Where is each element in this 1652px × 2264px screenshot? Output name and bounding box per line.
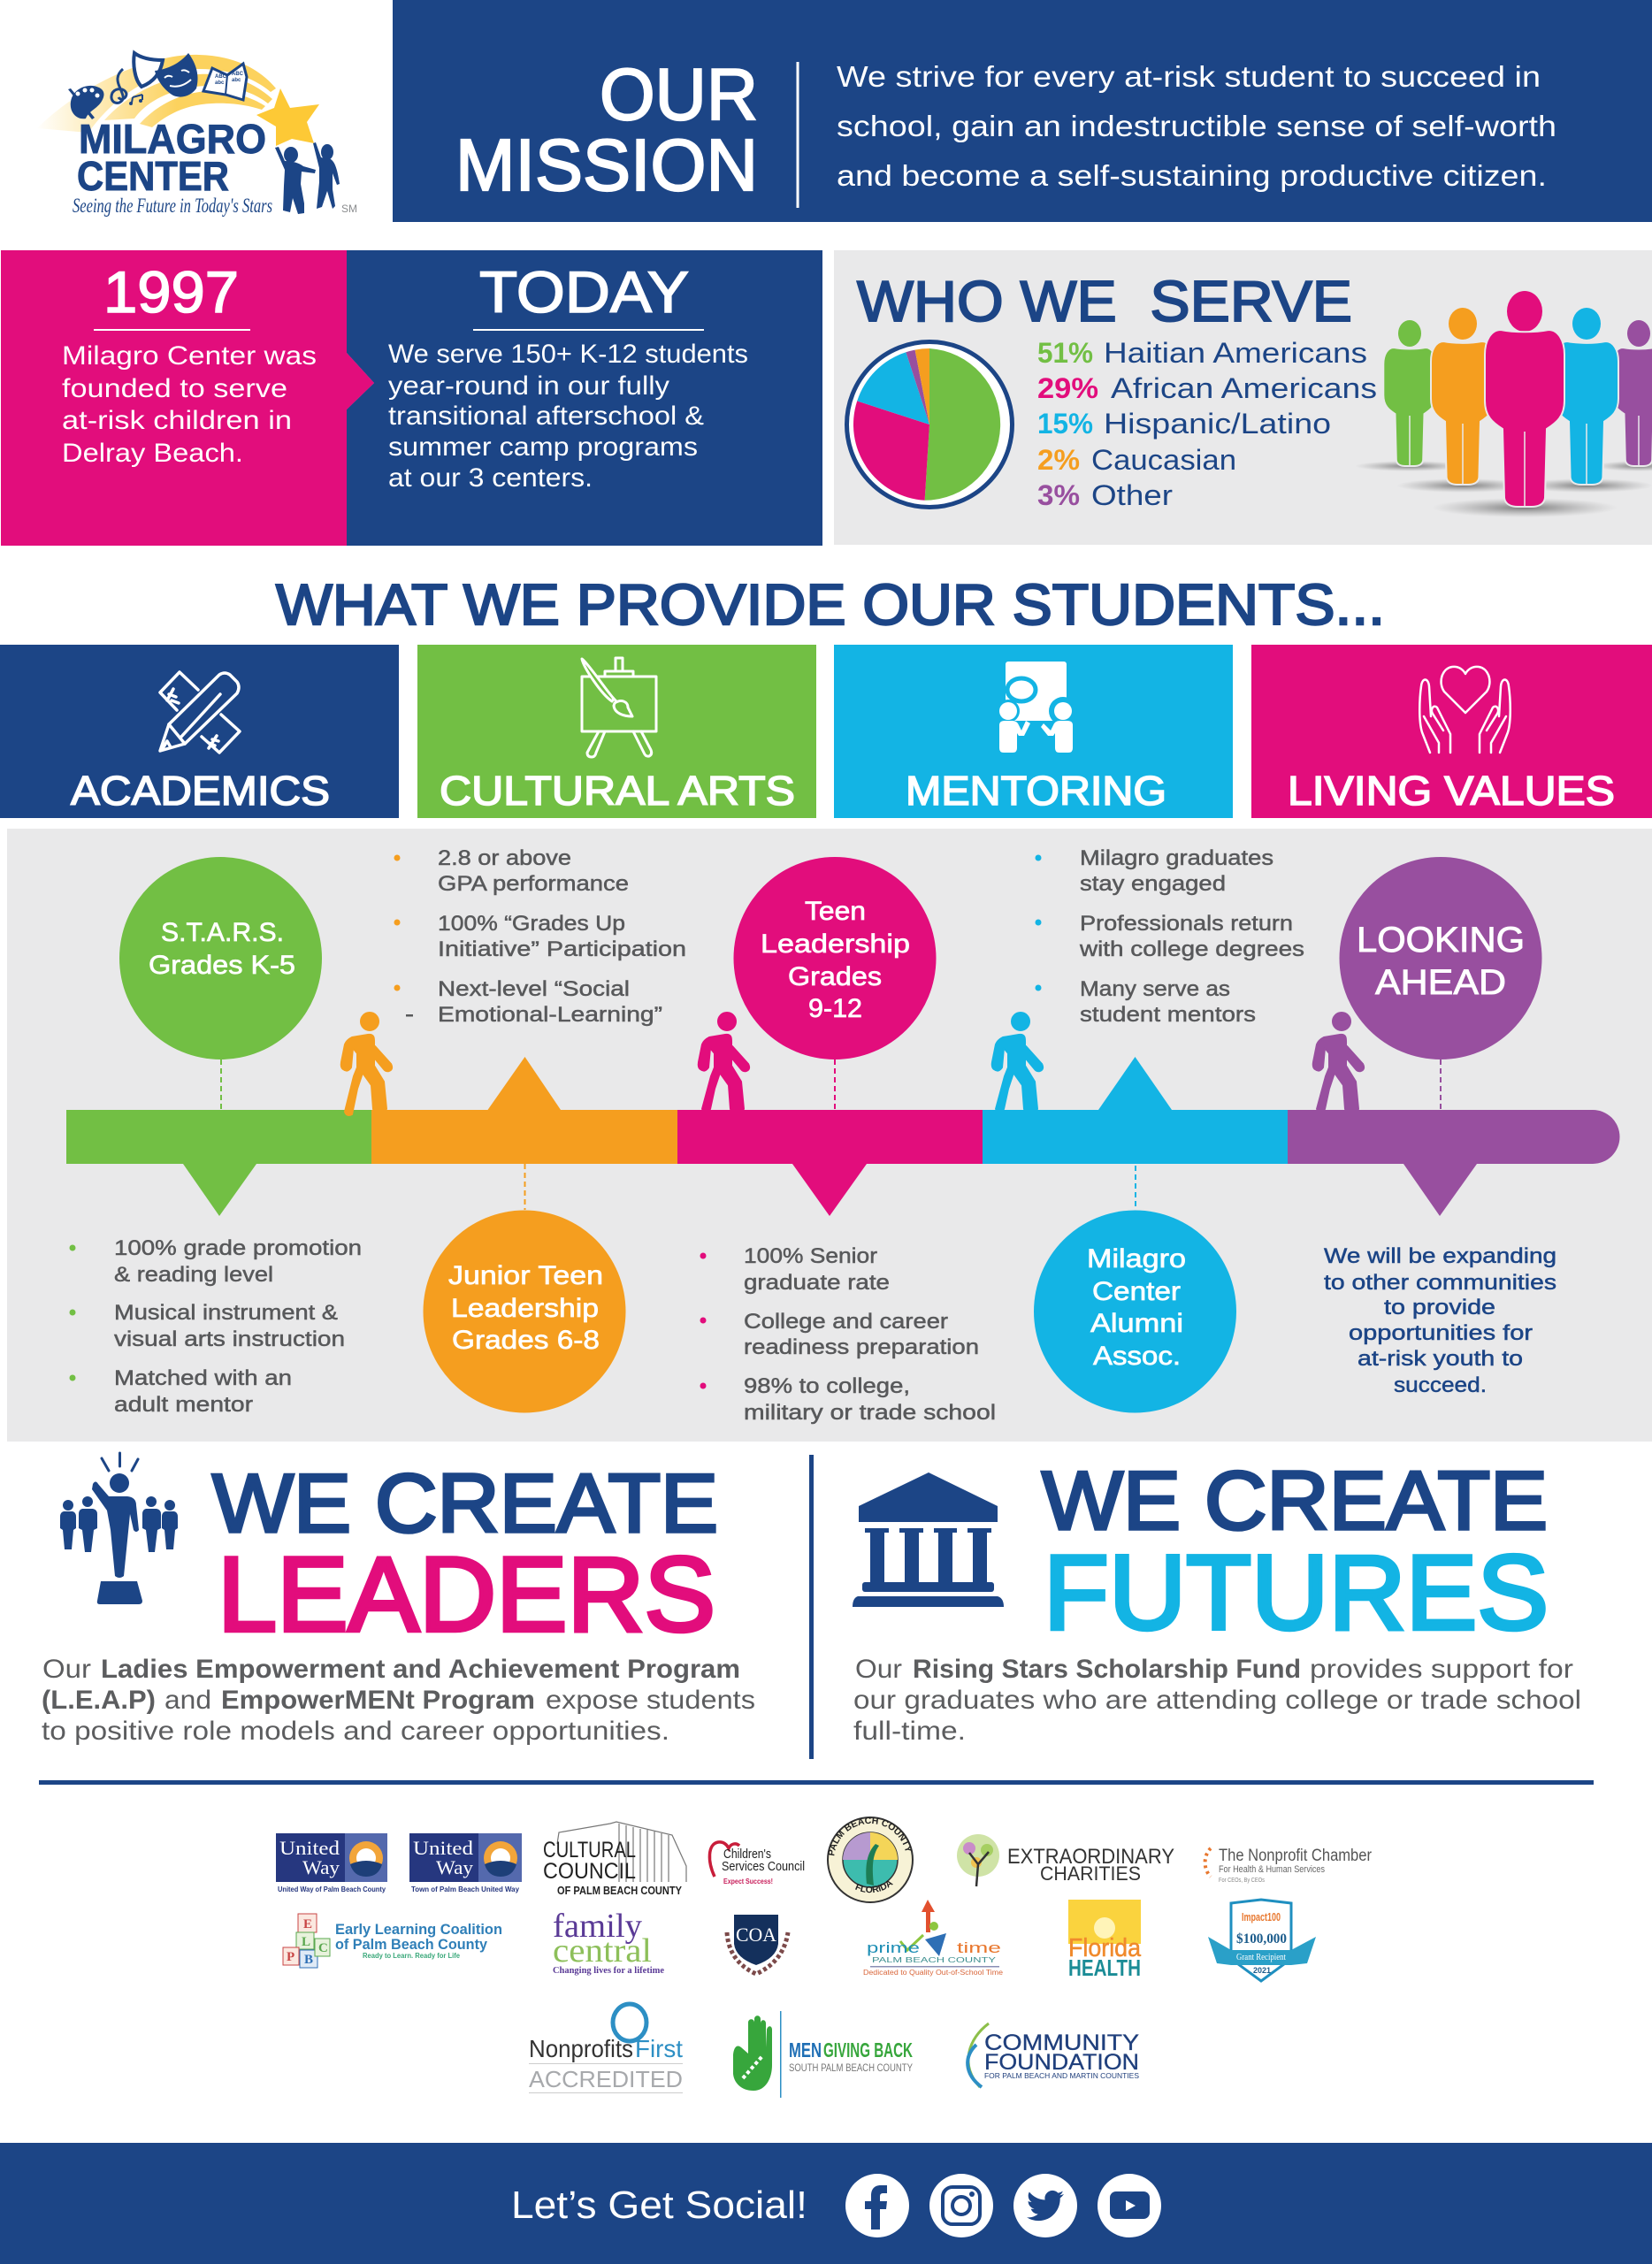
logo: star bbox=[256, 88, 319, 146]
circle: S.T.A.R.S.: Grades K-5 bbox=[149, 951, 295, 980]
futures paragraph: our graduates who are attending college or trade school bbox=[853, 1686, 1581, 1715]
heading: we create: WE CREATE bbox=[1042, 1454, 1548, 1547]
heading: futures: FUTURES bbox=[1044, 1534, 1549, 1652]
list: stars outcomes bbox=[69, 1236, 362, 1417]
list: alumni outcomes: Professionals return bbox=[1080, 912, 1293, 936]
logo: Cultural Council: COUNCIL bbox=[543, 1859, 636, 1884]
logo: United Way of Palm Beach County: Way bbox=[302, 1856, 340, 1878]
label: CULTURAL ARTS bbox=[440, 768, 795, 814]
list: alumni outcomes: with college degrees bbox=[1079, 937, 1304, 961]
logo: Men Giving Back bbox=[733, 2011, 913, 2098]
1997 text: at-risk children in bbox=[62, 406, 292, 435]
logo: COA: COA bbox=[736, 1924, 776, 1946]
today text: at our 3 centers. bbox=[388, 463, 593, 493]
logo: Early Learning Coalition: B bbox=[304, 1953, 313, 1967]
logo: Town of Palm Beach United Way bbox=[409, 1833, 522, 1893]
panel: we create leaders bbox=[42, 1453, 755, 1746]
today text: transitional afterschool & bbox=[388, 402, 704, 431]
list: junior teen outcomes: 100% “Grades Up bbox=[438, 912, 625, 936]
logo: Prime Time: prime bbox=[867, 1939, 920, 1956]
icon: hands holding heart bbox=[1419, 667, 1511, 753]
list: teen leadership outcomes: College and career bbox=[744, 1310, 948, 1334]
circle: S.T.A.R.S. bbox=[119, 857, 322, 1059]
logo: wordmark bbox=[77, 116, 266, 199]
logo: Florida Health bbox=[1068, 1900, 1142, 1981]
logo: open book: abc bbox=[232, 78, 241, 83]
list: alumni outcomes: Milagro graduates bbox=[1080, 846, 1273, 870]
logo: open book: ABC bbox=[232, 72, 244, 77]
legend: Caucasian bbox=[1091, 444, 1236, 476]
logo: Men Giving Back: GIVING BACK bbox=[823, 2038, 913, 2061]
panel: 1997 bbox=[1, 250, 374, 546]
list: stars outcomes: & reading level bbox=[114, 1263, 273, 1287]
logo: Early Learning Coalition: Ready to Learn. Ready for Life bbox=[363, 1952, 461, 1960]
panel: who we serve bbox=[834, 250, 1652, 545]
footer: social bbox=[0, 2143, 1652, 2264]
futures paragraph: Rising Stars Scholarship Fund bbox=[913, 1655, 1301, 1684]
text: looking ahead: to other communities bbox=[1324, 1271, 1556, 1295]
legend: African Americans bbox=[1111, 372, 1377, 404]
circle: teen leadership bbox=[734, 857, 936, 1059]
circle: S.T.A.R.S.: S.T.A.R.S. bbox=[161, 918, 284, 947]
panel: our mission bbox=[393, 0, 1652, 222]
logo: wordmark: MILAGRO bbox=[79, 116, 266, 162]
circle: alumni association: Milagro bbox=[1087, 1244, 1186, 1274]
logo: theatre masks bbox=[134, 53, 198, 97]
list: junior teen outcomes: Next-level “Social bbox=[438, 977, 630, 1001]
label: MENTORING bbox=[906, 768, 1166, 814]
logo: Children's Services Council: Expect Success! bbox=[723, 1878, 773, 1885]
list: teen leadership outcomes: 100% Senior bbox=[744, 1244, 877, 1268]
heading: we create: WE CREATE bbox=[212, 1457, 718, 1549]
list: stars outcomes: Musical instrument & bbox=[114, 1301, 338, 1325]
circle: junior teen leadership bbox=[423, 1210, 626, 1413]
logo: children silhouettes bbox=[275, 142, 340, 214]
circle: junior teen leadership: Junior Teen bbox=[448, 1261, 603, 1290]
logo: Children's Services Council: Children's bbox=[723, 1847, 771, 1862]
circle: teen leadership: Leadership bbox=[761, 929, 910, 959]
leaders paragraph: Our bbox=[42, 1655, 91, 1684]
icon: mentor and student bbox=[997, 662, 1077, 753]
logo: Impact 100: Impact100 bbox=[1242, 1910, 1281, 1924]
legend: Hispanic/Latino bbox=[1104, 408, 1331, 440]
list: teen leadership outcomes bbox=[700, 1244, 996, 1425]
leaders paragraph bbox=[42, 1655, 755, 1746]
icon: facebook bbox=[845, 2174, 909, 2237]
legend bbox=[1037, 337, 1377, 511]
logo: Extraordinary Charities: EXTRAORDINARY bbox=[1007, 1845, 1174, 1869]
logo: Children's Services Council: Services Council bbox=[722, 1859, 805, 1874]
circle: junior teen leadership: Leadership bbox=[451, 1294, 599, 1323]
icon: institution building bbox=[853, 1472, 1004, 1607]
logo: Men Giving Back: SOUTH PALM BEACH COUNTY bbox=[789, 2061, 913, 2074]
list: teen leadership outcomes: readiness preparation bbox=[744, 1335, 979, 1359]
logo: Early Learning Coalition: L bbox=[302, 1935, 310, 1949]
list: teen leadership outcomes: 98% to college, bbox=[744, 1374, 910, 1398]
mission statement: and become a self-sustaining productive citizen. bbox=[837, 159, 1547, 192]
text: looking ahead: We will be expanding bbox=[1324, 1244, 1556, 1268]
list: junior teen outcomes: Initiative” Participation bbox=[438, 937, 686, 961]
circle: alumni association: Assoc. bbox=[1093, 1342, 1181, 1371]
logo: yellow rainbow arcs bbox=[37, 55, 276, 133]
logo: Prime Time: PALM BEACH COUNTY bbox=[872, 1956, 997, 1964]
logo: open book: abc bbox=[215, 80, 225, 86]
heading: what we provide: WHAT WE PROVIDE OUR STUDENTS... bbox=[276, 572, 1385, 637]
legend: 3% bbox=[1037, 479, 1080, 511]
heading: leaders: LEADERS bbox=[218, 1535, 715, 1654]
logo: Community Foundation bbox=[967, 2023, 1139, 2087]
legend: 15% bbox=[1037, 408, 1093, 440]
sponsor logos bbox=[276, 1817, 1373, 2098]
icon: twitter bbox=[1013, 2174, 1077, 2237]
logo: Palm Beach County seal bbox=[827, 1817, 914, 1903]
legend: Other bbox=[1091, 479, 1173, 511]
logo: Early Learning Coalition bbox=[283, 1914, 502, 1968]
logo: Prime Time: Dedicated to Quality Out-of-School Time bbox=[863, 1969, 1004, 1977]
leaders paragraph: to positive role models and career opportunities. bbox=[42, 1717, 669, 1746]
logo: Florida Health: Florida bbox=[1068, 1934, 1142, 1962]
logo: Palm Beach County seal: FLORIDA bbox=[855, 1880, 893, 1893]
logo: treble clef and notes bbox=[111, 69, 142, 105]
pie chart bbox=[847, 341, 1012, 508]
logo: Town of Palm Beach United Way: United bbox=[413, 1837, 473, 1859]
leaders paragraph: expose students bbox=[546, 1686, 755, 1715]
panel: we create futures bbox=[853, 1454, 1581, 1746]
icon: walker orange bbox=[341, 1013, 392, 1115]
today text: We serve 150+ K-12 students bbox=[388, 340, 748, 369]
list: junior teen outcomes: Emotional-Learning” bbox=[438, 1003, 662, 1027]
tile: living values bbox=[1251, 645, 1652, 818]
who we serve heading: WHO WE SERVE bbox=[857, 269, 1352, 333]
tile: academics bbox=[0, 645, 399, 818]
futures paragraph: full-time. bbox=[853, 1717, 966, 1746]
logo: Early Learning Coalition: P bbox=[287, 1950, 294, 1964]
tile: mentoring bbox=[834, 645, 1233, 818]
icon: instagram bbox=[929, 2174, 993, 2237]
logo: Prime Time bbox=[863, 1900, 1004, 1977]
logo: United Way of Palm Beach County bbox=[276, 1833, 387, 1893]
logo: Nonprofits First: First bbox=[635, 2035, 683, 2062]
logo: Community Foundation: COMMUNITY bbox=[984, 2031, 1139, 2055]
logo: wordmark: CENTER bbox=[77, 153, 229, 199]
legend: Haitian Americans bbox=[1104, 337, 1367, 369]
logo: Nonprofits First: ACCREDITED bbox=[529, 2066, 683, 2092]
mission statement: We strive for every at-risk student to succeed in bbox=[837, 60, 1541, 93]
icon: youtube bbox=[1098, 2174, 1161, 2237]
text: looking ahead: succeed. bbox=[1394, 1373, 1487, 1397]
futures paragraph: Our bbox=[855, 1655, 902, 1684]
logo: Florida Health: HEALTH bbox=[1068, 1954, 1141, 1981]
logo: Nonprofits First: Nonprofits bbox=[529, 2035, 633, 2062]
1997 text: Delray Beach. bbox=[62, 439, 243, 468]
icon: easel and brush bbox=[582, 658, 656, 757]
logo: Extraordinary Charities bbox=[957, 1834, 1174, 1886]
icon: walker purple bbox=[1313, 1013, 1364, 1109]
logo: service mark: SM bbox=[341, 203, 357, 215]
tile: cultural arts bbox=[417, 645, 816, 818]
logo: Impact 100 bbox=[1208, 1900, 1316, 1981]
list: teen leadership outcomes: military or trade school bbox=[744, 1401, 996, 1425]
logo: Early Learning Coalition: C bbox=[318, 1941, 328, 1955]
1997 text bbox=[62, 341, 317, 468]
circle: alumni association: Center bbox=[1092, 1277, 1181, 1306]
logo: Palm Beach County seal: PALM BEACH COUNTY bbox=[828, 1817, 913, 1855]
circle: teen leadership: Teen bbox=[805, 897, 866, 926]
rule bbox=[473, 329, 704, 331]
list: alumni outcomes: student mentors bbox=[1080, 1003, 1256, 1027]
mission heading bbox=[455, 53, 758, 206]
today text bbox=[388, 340, 748, 493]
legend: 29% bbox=[1037, 372, 1098, 404]
panel: today bbox=[347, 250, 822, 546]
leaders paragraph: (L.E.A.P) bbox=[42, 1686, 156, 1715]
logo: Early Learning Coalition: of Palm Beach County bbox=[335, 1936, 488, 1953]
logo: Family Central bbox=[553, 1908, 664, 1976]
list: stars outcomes: 100% grade promotion bbox=[114, 1236, 362, 1260]
mission heading: OUR bbox=[600, 53, 758, 135]
legend: 2% bbox=[1037, 444, 1080, 476]
dashed connectors bbox=[221, 1059, 1441, 1210]
logo: United Way of Palm Beach County: United Way of Palm Beach County bbox=[278, 1885, 386, 1893]
logo: Community Foundation: FOR PALM BEACH AND MARTIN COUNTIES bbox=[984, 2071, 1139, 2080]
icon: walker blue bbox=[992, 1013, 1043, 1109]
text: looking ahead: opportunities for bbox=[1349, 1321, 1533, 1345]
logo: open book: ABC bbox=[215, 74, 227, 80]
today heading: TODAY bbox=[479, 259, 689, 325]
list: alumni outcomes: Many serve as bbox=[1080, 977, 1230, 1001]
logo: The Nonprofit Chamber bbox=[1205, 1847, 1373, 1884]
text: looking ahead: at-risk youth to bbox=[1358, 1347, 1523, 1371]
circle: alumni association: Alumni bbox=[1090, 1309, 1183, 1338]
mission heading: MISSION bbox=[455, 124, 758, 206]
rule bbox=[94, 329, 250, 331]
logo: Prime Time: time bbox=[957, 1939, 1001, 1956]
circle: looking ahead: LOOKING bbox=[1357, 921, 1525, 960]
logo: Cultural Council: CULTURAL bbox=[543, 1838, 636, 1862]
logo: Impact 100: Grant Recipient bbox=[1236, 1953, 1286, 1962]
timeline bar bbox=[66, 1057, 1619, 1216]
logo: The Nonprofit Chamber: For CEOs, By CEOs bbox=[1219, 1878, 1265, 1884]
circle: alumni association bbox=[1034, 1210, 1236, 1413]
logo: COA bbox=[727, 1915, 788, 1974]
1997 heading: 1997 bbox=[103, 259, 239, 325]
logo: Town of Palm Beach United Way: Way bbox=[436, 1856, 473, 1878]
leaders paragraph: Ladies Empowerment and Achievement Program bbox=[101, 1655, 740, 1684]
circle: teen leadership: 9-12 bbox=[808, 994, 862, 1023]
1997 text: founded to serve bbox=[62, 374, 287, 403]
logo: Community Foundation: FOUNDATION bbox=[984, 2050, 1139, 2075]
icon: walker pink bbox=[699, 1013, 749, 1109]
mission statement: school, gain an indestructible sense of self-worth bbox=[837, 110, 1556, 142]
logo: Cultural Council: OF PALM BEACH COUNTY bbox=[557, 1884, 682, 1897]
logo: The Nonprofit Chamber: The Nonprofit Chamber bbox=[1219, 1847, 1373, 1865]
label: ACADEMICS bbox=[71, 768, 330, 814]
label: LIVING VALUES bbox=[1288, 768, 1615, 814]
leaders paragraph: and bbox=[164, 1686, 211, 1715]
divider bbox=[796, 62, 799, 208]
logo: palette bbox=[68, 86, 104, 119]
logo: Early Learning Coalition: Early Learning Coalition bbox=[335, 1921, 502, 1938]
logo: The Nonprofit Chamber: For Health & Human Services bbox=[1219, 1864, 1325, 1875]
logo: tagline: Seeing the Future in Today's Stars bbox=[73, 195, 272, 217]
futures paragraph bbox=[853, 1655, 1581, 1746]
icon: leader with group bbox=[60, 1453, 178, 1604]
today text: summer camp programs bbox=[388, 432, 698, 462]
logo: Early Learning Coalition: E bbox=[303, 1917, 312, 1931]
logo: Town of Palm Beach United Way: Town of Palm Beach United Way bbox=[411, 1885, 520, 1893]
legend: 51% bbox=[1037, 337, 1093, 369]
circle: looking ahead bbox=[1339, 857, 1542, 1059]
mission statement bbox=[837, 60, 1556, 192]
list: alumni outcomes bbox=[1035, 846, 1304, 1027]
logo: Family Central: Changing lives for a lifetime bbox=[553, 1965, 664, 1976]
text: looking ahead bbox=[1324, 1244, 1556, 1397]
list: junior teen outcomes bbox=[394, 846, 686, 1027]
footer text: Let’s Get Social! bbox=[511, 2184, 807, 2227]
list: stars outcomes: visual arts instruction bbox=[114, 1327, 345, 1351]
1997 text: Milagro Center was bbox=[62, 341, 317, 371]
list: junior teen outcomes: 2.8 or above bbox=[438, 846, 571, 870]
logo: Family Central: central bbox=[553, 1932, 652, 1970]
list: teen leadership outcomes: graduate rate bbox=[744, 1271, 890, 1295]
list: alumni outcomes: stay engaged bbox=[1080, 872, 1226, 896]
logo: open book bbox=[203, 64, 247, 100]
panel: timeline bbox=[7, 829, 1652, 1442]
icon: group of people bbox=[1355, 291, 1652, 517]
logo: Men Giving Back: MEN bbox=[789, 2038, 822, 2061]
logo: United Way of Palm Beach County: United bbox=[279, 1837, 340, 1859]
logo: Family Central: family bbox=[553, 1908, 642, 1945]
logo: Extraordinary Charities: CHARITIES bbox=[1040, 1862, 1141, 1885]
circle: teen leadership: Grades bbox=[788, 962, 882, 991]
icon: pencil and ruler bbox=[160, 672, 240, 753]
list: stars outcomes: adult mentor bbox=[114, 1393, 253, 1417]
logo: Children's Services Council bbox=[709, 1842, 805, 1885]
leaders paragraph: EmpowerMENt Program bbox=[221, 1686, 535, 1715]
logo: Impact 100: $100,000 bbox=[1236, 1931, 1287, 1947]
logo: Nonprofits First bbox=[529, 2004, 683, 2093]
list: stars outcomes: Matched with an bbox=[114, 1366, 292, 1390]
logo: Cultural Council bbox=[543, 1822, 686, 1897]
circle: junior teen leadership: Grades 6-8 bbox=[452, 1326, 600, 1355]
logo: Impact 100: 2021 bbox=[1253, 1966, 1271, 1975]
text: looking ahead: to provide bbox=[1384, 1296, 1495, 1319]
circle: looking ahead: AHEAD bbox=[1375, 963, 1506, 1002]
list: junior teen outcomes: GPA performance bbox=[438, 872, 629, 896]
logo: Milagro Center bbox=[37, 53, 357, 217]
futures paragraph: provides support for bbox=[1310, 1655, 1573, 1684]
today text: year-round in our fully bbox=[388, 371, 669, 401]
